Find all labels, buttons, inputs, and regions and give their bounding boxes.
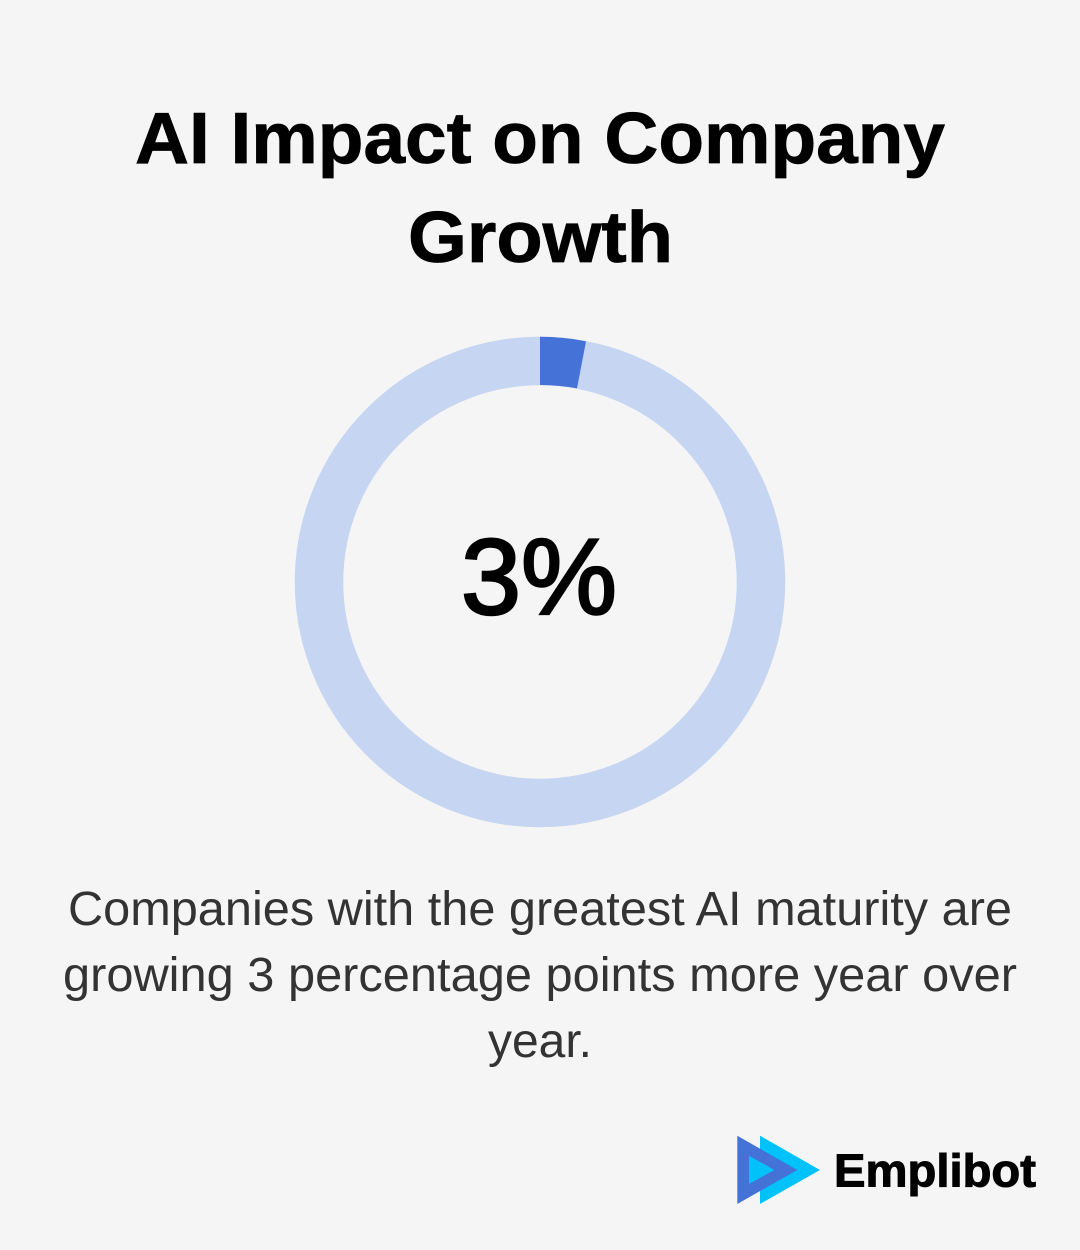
description text: growing 3 percentage points more year over <box>63 949 1017 1002</box>
description text: Companies with the greatest AI maturity are <box>68 883 1012 936</box>
title: Growth <box>408 198 673 278</box>
title <box>135 99 945 278</box>
icon: play triangles <box>737 1136 820 1204</box>
donut chart: 3 percent <box>319 337 761 803</box>
description text <box>63 883 1017 1068</box>
donut center value: 3% <box>461 516 617 637</box>
description text: year. <box>488 1015 592 1068</box>
title: AI Impact on Company <box>135 99 945 179</box>
logo wordmark: Emplibot <box>834 1144 1036 1196</box>
donut track <box>319 361 761 803</box>
Emplibot logo <box>737 1136 1036 1204</box>
donut highlighted segment <box>540 337 586 388</box>
